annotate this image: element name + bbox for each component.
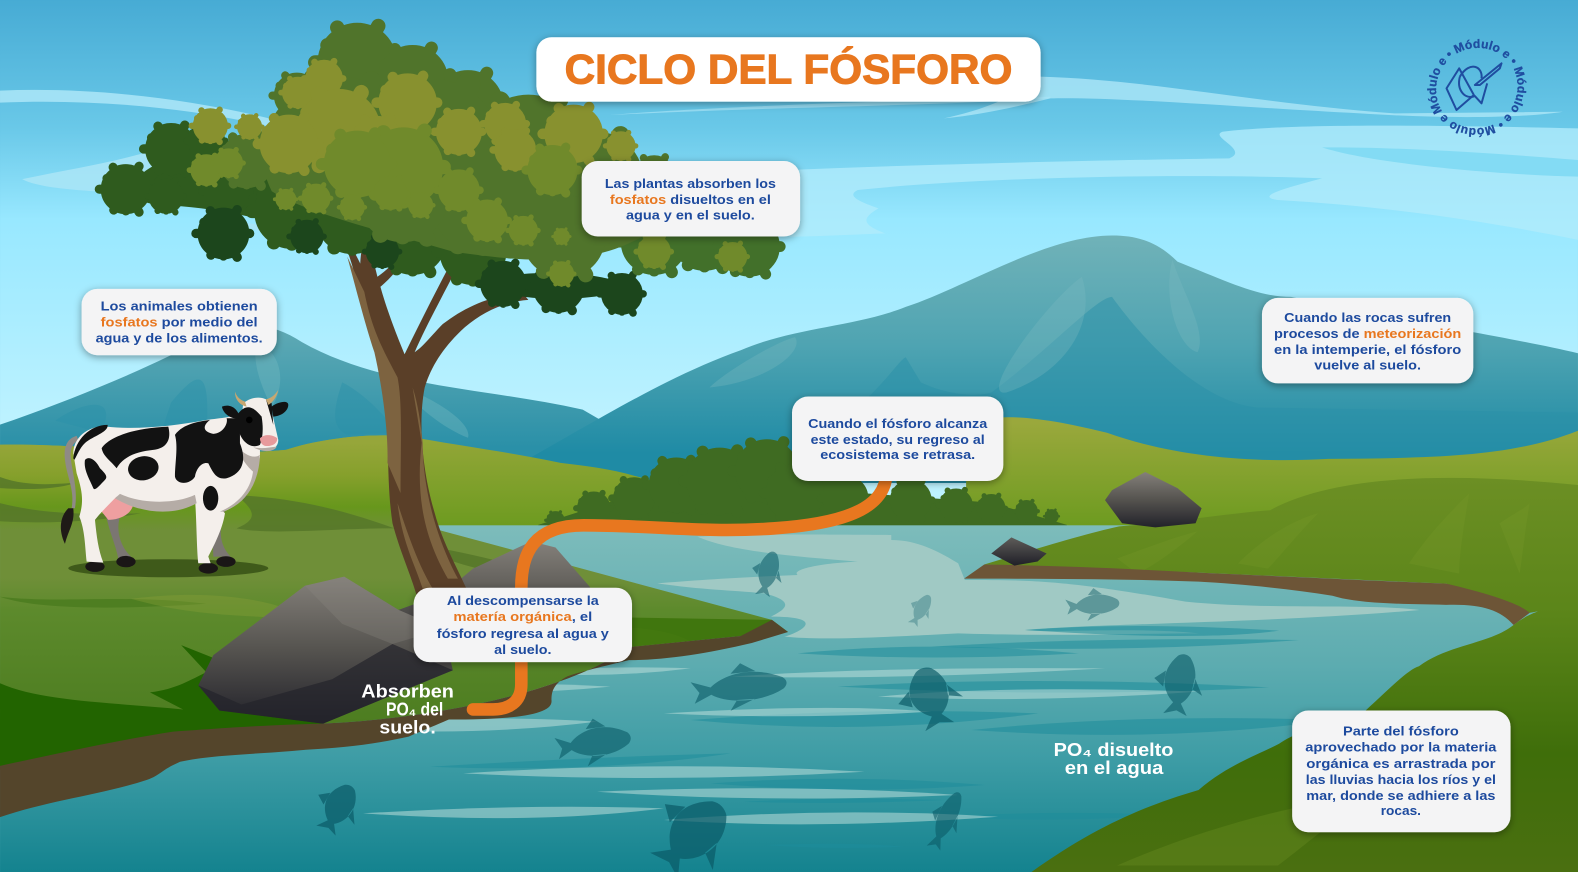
icon: book and pencil <box>1447 63 1502 110</box>
foliage light upper <box>192 61 636 171</box>
callout: runoff: mar, donde se adhiere a las <box>1306 788 1495 803</box>
rocks on the left bank <box>198 541 604 724</box>
fish shadows <box>304 548 1209 872</box>
callout: delayed return: este estado, su regreso al <box>811 432 985 447</box>
orange connector bottom <box>473 662 521 709</box>
hills behind the river <box>0 417 1578 644</box>
title <box>536 37 1041 102</box>
callout: weathering: procesos de meteorización <box>1274 326 1461 341</box>
tail <box>65 436 78 508</box>
muzzle <box>260 435 277 446</box>
fish <box>902 589 939 630</box>
callout: organic matter: fósforo regresa al agua y <box>437 626 610 641</box>
fish <box>633 777 749 872</box>
far legs <box>107 510 231 558</box>
label: disuelto: PO₄ disuelto <box>1054 739 1173 760</box>
eye <box>246 417 253 423</box>
callout: weathering <box>1262 298 1473 383</box>
right mountain <box>503 235 1578 483</box>
callout: runoff: orgánica es arrastrada por <box>1306 756 1495 771</box>
body <box>73 413 260 563</box>
head <box>242 398 278 451</box>
horns <box>235 390 278 407</box>
callout: plants <box>582 161 800 236</box>
callout: runoff: rocas. <box>1381 803 1421 818</box>
fish <box>746 548 789 600</box>
callout: weathering: en la intemperie, el fósforo <box>1274 342 1461 357</box>
left river bank <box>0 435 788 817</box>
tree trunk <box>332 221 528 599</box>
label: disuelto <box>1054 739 1173 778</box>
left mountain <box>0 326 614 473</box>
dark grass lower <box>0 645 332 770</box>
label: absorben: Absorben <box>361 680 454 701</box>
logo Módulo e: Módulo e • Módulo e • Módulo e • Módulo e • <box>1427 38 1526 138</box>
foliage light lower <box>189 131 747 285</box>
large rock <box>1105 472 1202 527</box>
orange connector top <box>521 471 887 588</box>
hooves <box>85 556 236 574</box>
ground shadow <box>68 559 268 577</box>
callout: runoff: las lluvias hacia los ríos y el <box>1306 772 1496 787</box>
small rock <box>991 537 1047 566</box>
fish <box>689 659 789 715</box>
label: absorben: PO₄ del <box>386 699 443 720</box>
callout: organic matter: al suelo. <box>494 642 552 657</box>
callout: animals: Los animales obtienen <box>101 298 258 313</box>
callout: runoff: Parte del fósforo <box>1343 724 1459 739</box>
inner valleys <box>805 297 1578 483</box>
spots <box>73 418 243 511</box>
bush behind river <box>538 442 1067 529</box>
logo Módulo e <box>1427 38 1526 138</box>
callout: organic matter <box>414 588 632 662</box>
ears <box>222 399 288 425</box>
callout: animals <box>82 289 277 355</box>
grass shading <box>0 477 579 586</box>
label: absorben: suelo. <box>379 717 436 738</box>
callout: organic matter: Al descompensarse la <box>447 593 600 608</box>
label: disuelto: en el agua <box>1065 757 1164 778</box>
fish <box>918 786 972 855</box>
grass tufts <box>1117 493 1530 865</box>
upper rock <box>399 541 604 664</box>
callout: animals: fosfatos por medio del <box>101 315 258 330</box>
callout: plants: Las plantas absorben los <box>605 176 776 191</box>
fish <box>891 660 969 736</box>
fish <box>1065 586 1120 622</box>
callout: weathering: vuelve al suelo. <box>1314 357 1421 372</box>
foliage main crown <box>218 26 675 275</box>
belly shadow <box>115 447 260 512</box>
bank soil <box>0 620 788 817</box>
callout: delayed return: ecosistema se retrasa. <box>820 447 975 462</box>
cow <box>61 390 288 577</box>
callout: plants: fosfatos disueltos en el <box>610 192 771 207</box>
foliage dark lower <box>196 210 643 313</box>
callout: weathering: Cuando las rocas sufren <box>1284 310 1451 325</box>
callout: runoff: aprovechado por la materia <box>1305 740 1497 755</box>
river <box>0 525 1578 872</box>
callout: animals: agua y de los alimentos. <box>96 331 263 346</box>
callout: delayed return <box>792 397 1003 481</box>
fish <box>553 714 634 770</box>
rocks on the right bank <box>991 472 1202 566</box>
label: absorben <box>361 680 454 738</box>
fish <box>1149 650 1209 719</box>
udder <box>102 496 133 520</box>
foliage mid right <box>619 205 780 274</box>
callout: runoff <box>1292 710 1511 832</box>
callout: delayed return: Cuando el fósforo alcanza <box>808 416 988 431</box>
fish <box>304 774 370 842</box>
tree foliage <box>99 26 780 313</box>
callout: plants: agua y en el suelo. <box>626 207 755 222</box>
currents and streaks <box>316 535 1420 848</box>
right river bank <box>964 478 1578 872</box>
big rock <box>198 577 453 724</box>
clouds <box>0 77 1578 240</box>
foliage back <box>99 124 507 282</box>
callout: organic matter: matería orgánica , el <box>453 609 592 624</box>
title: CICLO DEL FÓSFORO <box>565 47 1012 93</box>
bank soil <box>964 565 1530 625</box>
